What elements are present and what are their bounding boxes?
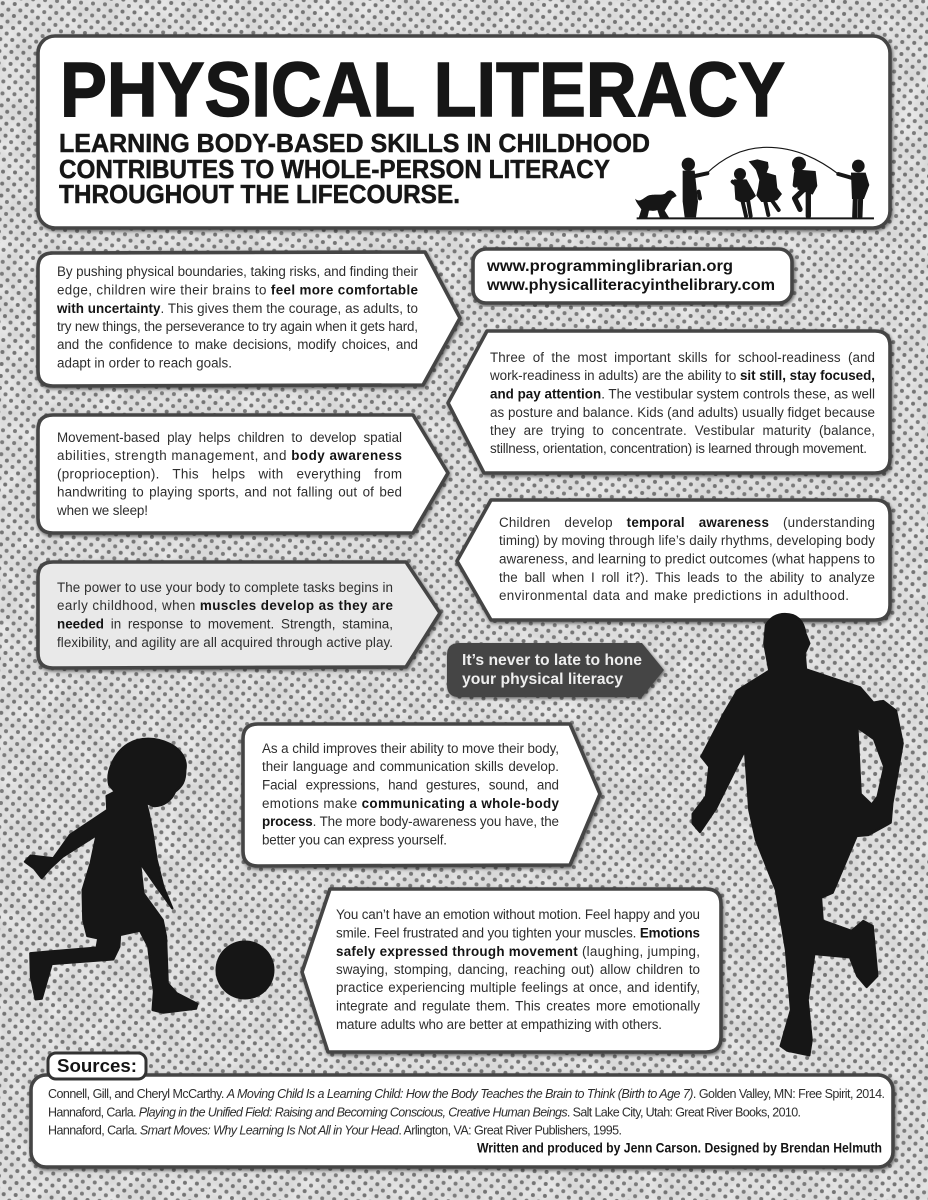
text block: as posture and balance. Kids (and adults) usually fidget because (490, 405, 875, 420)
illustration: ball (216, 940, 274, 1000)
links: www.physicalliteracyinthelibrary.com (486, 277, 775, 294)
text block: practice experiencing multiple feelings at once, and identify, (336, 980, 700, 995)
text block: abilities, strength management, and body awareness (57, 448, 402, 463)
source list: Hannaford, Carla. Smart Moves: Why Learning Is Not All in Your Head. Arlington, VA: Great River Publishers, 1995. (48, 1124, 622, 1138)
panel: emotions and motion (302, 889, 721, 1052)
text block: Facial expressions, hand gestures, sound, and (262, 778, 559, 792)
panel: muscles (38, 562, 440, 668)
source list: Connell, Gill, and Cheryl McCarthy. A Moving Child Is a Learning Child: How the Body Teaches the Brain to Think (Birth to Age 7). Golden Valley, MN: Free Spirit, 2014. (48, 1087, 885, 1101)
subtitle (59, 128, 650, 209)
subtitle: CONTRIBUTES TO WHOLE-PERSON LITERACY (59, 154, 610, 184)
text block: when we sleep! (56, 503, 148, 518)
text block: Movement-based play helps children to develop spatial (57, 430, 402, 445)
panel: sit still (448, 331, 890, 473)
text block: they are trying to concentrate. Vestibular maturity (balance, (490, 423, 875, 438)
text block: (proprioception). This helps with everything from (57, 466, 402, 482)
text block: flexibility, and agility are all acquired through active play. (57, 635, 393, 650)
links (486, 258, 775, 294)
callout: never too late: your physical literacy (462, 671, 623, 688)
source list (48, 1087, 885, 1138)
panel: temporal awareness (457, 500, 890, 620)
panel: whole-body communication (243, 724, 600, 866)
panel: website links (473, 249, 792, 303)
text block: smile. Feel frustrated and you tighten your muscles. Emotions (336, 926, 700, 940)
illustration: running man silhouette (693, 614, 903, 1055)
text block (262, 741, 560, 848)
text block (336, 907, 700, 1032)
text block (499, 515, 875, 603)
text block: early childhood, when muscles develop as they are (57, 598, 393, 613)
illustration: child kicking silhouette (25, 739, 197, 1013)
text block: handwriting to playing sports, and not falling out of bed (57, 484, 402, 500)
panel: uncertainty (38, 252, 460, 386)
heading: sources tab: Sources: (57, 1055, 137, 1076)
icon: children skipping rope with dog (635, 147, 874, 219)
text block: mature adults who are better at empathizing with others. (336, 1017, 662, 1032)
text block: environmental data and make predictions in adulthood. (499, 588, 849, 603)
title: PHYSICAL LITERACY (60, 47, 785, 133)
links: www.programminglibrarian.org (486, 258, 733, 275)
source list: Hannaford, Carla. Playing in the Unified Field: Raising and Becoming Conscious, Creative Human Beings. Salt Lake City, Utah: Great River Books, 2010. (48, 1106, 801, 1120)
text block: stillness, orientation, concentration) is learned through movement. (490, 441, 867, 456)
text block: timing) by moving through life’s daily rhythms, developing body (499, 533, 875, 548)
panel: body awareness (38, 415, 448, 533)
callout: never too late: It’s never to late to hone (462, 652, 642, 669)
text block: adapt in order to reach goals. (57, 356, 232, 370)
credits: Written and produced by Jenn Carson. Designed by Brendan Helmuth (477, 1140, 882, 1156)
text block: As a child improves their ability to move their body, (262, 741, 559, 756)
text block (57, 580, 393, 650)
text block: with uncertainty. This gives them the courage, as adults, to (56, 301, 418, 316)
callout: never too late (447, 643, 664, 697)
text block: awareness, and learning to predict outcomes (what happens to (499, 552, 875, 566)
text block: work-readiness in adults) are the ability to sit still, stay focused, (489, 368, 875, 383)
panel: sources (31, 1075, 893, 1167)
text block (489, 350, 875, 456)
text block: edge, children wire their brains to feel more comfortable (57, 282, 418, 298)
text block: The power to use your body to complete tasks begins in (57, 580, 393, 595)
text block: their language and communication skills develop. (262, 759, 559, 774)
subtitle: LEARNING BODY-BASED SKILLS IN CHILDHOOD (59, 128, 650, 158)
text block: safely expressed through movement (laughing, jumping, (336, 944, 700, 959)
text block: You can’t have an emotion without motion. Feel happy and you (336, 907, 700, 922)
subtitle: THROUGHOUT THE LIFECOURSE. (59, 179, 460, 209)
heading: sources tab (48, 1053, 146, 1079)
text block: Three of the most important skills for school-readiness (and (490, 350, 875, 365)
text block: swaying, stomping, dancing, reaching out) allow children to (336, 962, 700, 977)
panel: title header (38, 36, 890, 228)
text block: needed in response to movement. Strength, stamina, (57, 616, 393, 632)
text block: By pushing physical boundaries, taking risks, and finding their (57, 264, 419, 279)
text block: and the confidence to make decisions, modify choices, and (57, 337, 418, 352)
text block: and pay attention. The vestibular system controls these, as well (490, 386, 875, 402)
text block: integrate and regulate them. This creates more emotionally (336, 998, 700, 1014)
text block: Children develop temporal awareness (understanding (499, 515, 875, 530)
text block: emotions make communicating a whole-body (262, 796, 560, 811)
text block: better you can express yourself. (262, 832, 447, 848)
text block: process. The more body-awareness you have, the (262, 814, 559, 829)
text block (56, 430, 402, 518)
text block: try new things, the perseverance to try again when it gets hard, (57, 319, 418, 334)
text block (56, 264, 419, 370)
text block: the ball when I roll it?). This leads to the ability to analyze (499, 570, 875, 585)
